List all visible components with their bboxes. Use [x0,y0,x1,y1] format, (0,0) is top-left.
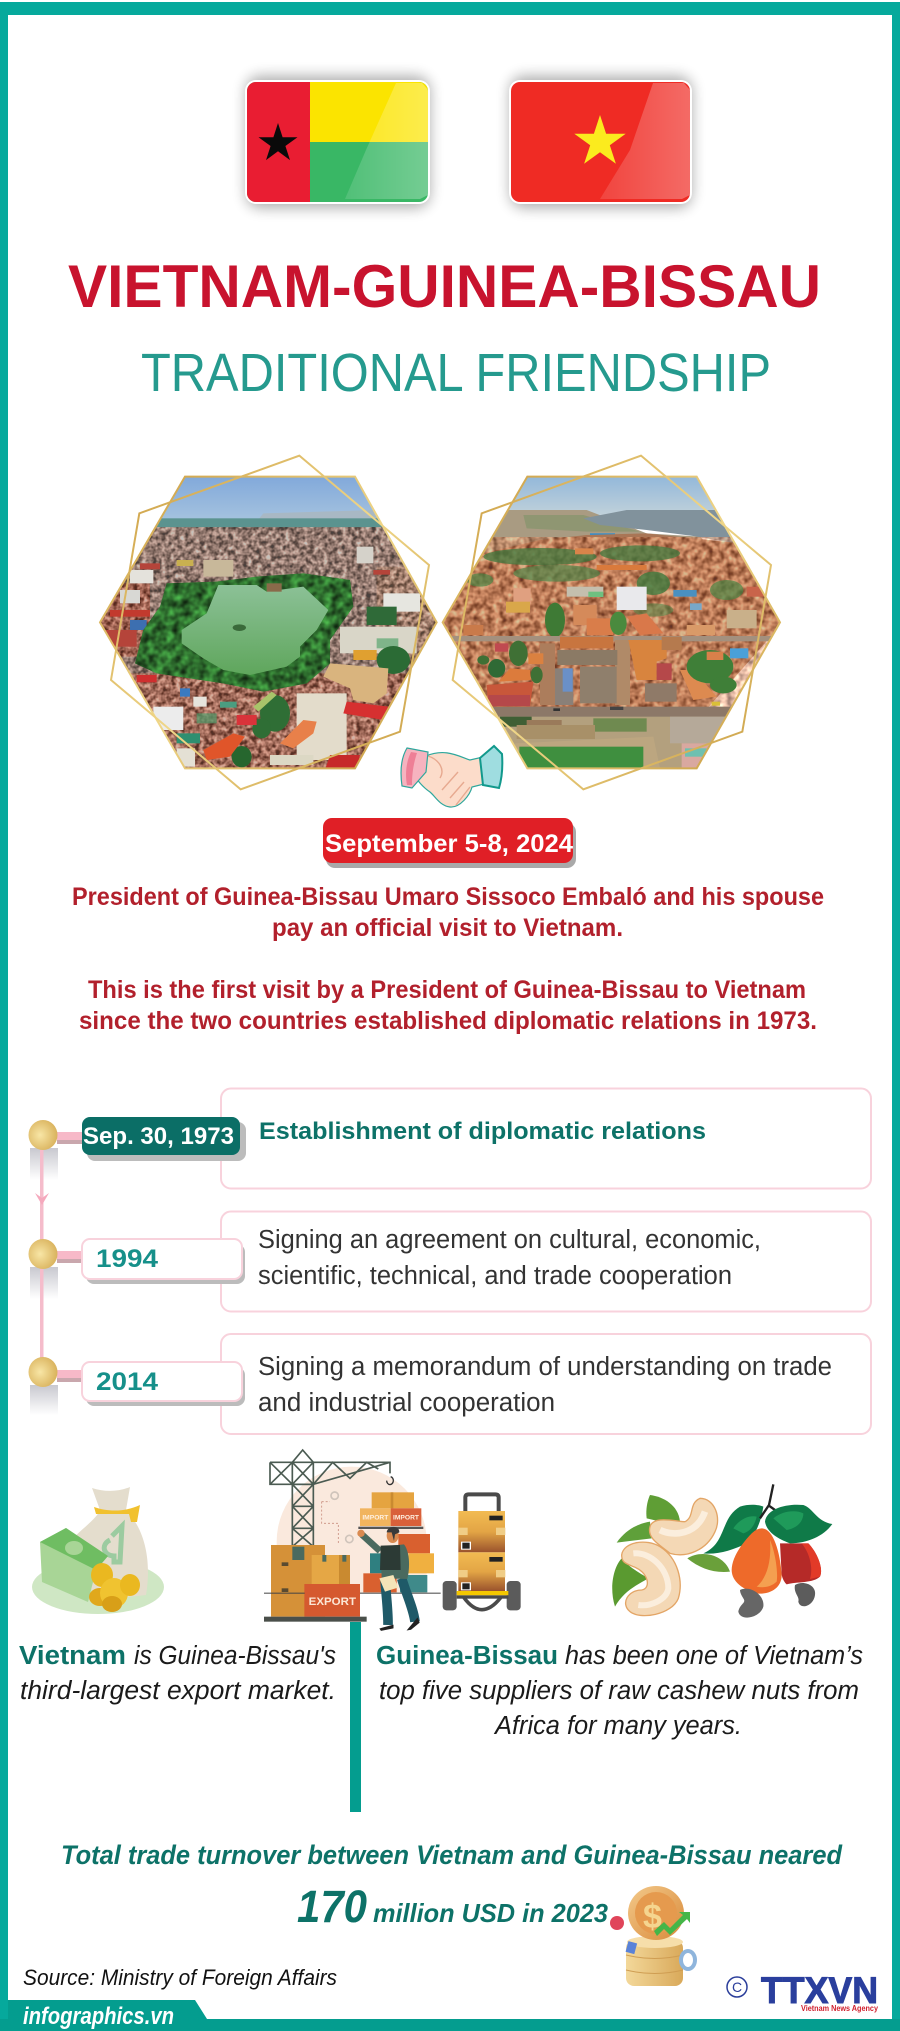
timeline [28,1088,871,1434]
text: Guinea-Bissau cashew supply: Guinea-Bissau [376,1642,558,1670]
text block: official visit [72,883,824,1035]
text: Vietnam export market [19,1642,336,1705]
logo: TTXVN: Vietnam News Agency [801,2004,878,2013]
leaves [612,1495,763,1607]
subtitle: TRADITIONAL FRIENDSHIP [141,344,771,403]
text: Guinea-Bissau cashew supply: top five suppliers of raw cashew nuts from [379,1677,859,1705]
text: total trade turnover [61,1840,842,1932]
photo: Bissau aerial view [440,456,790,789]
date pill [323,818,576,868]
worker [357,1527,419,1630]
cashew nuts [622,1498,718,1616]
divider bar [350,1622,361,1812]
text: Vietnam export market: third-largest export market. [20,1677,336,1705]
text block: official visit: This is the first visit by a President of Guinea-Bissau to Vietnam [88,976,806,1004]
text: total trade turnover: Total trade turnover between Vietnam and Guinea-Bissau neared [61,1840,842,1870]
event 1973: Sep. 30, 1973 [83,1123,234,1150]
crane [270,1450,393,1547]
text: Guinea-Bissau cashew supply: has been one of Vietnam’s [565,1642,863,1670]
text: total trade turnover: million USD in 2023 [373,1898,609,1928]
flag: Vietnam [509,76,692,208]
gold outline: hexagon frame [443,456,780,789]
text: total trade turnover: 170 [297,1881,367,1932]
cargo boxes: EXPORT [309,1596,356,1608]
date pill: September 5-8, 2024 [325,830,573,858]
import crates: IMPORT [393,1515,419,1522]
event 2014: 2014 [96,1368,158,1396]
text: Vietnam export market: is Guinea-Bissau's [134,1642,336,1670]
stem [760,1484,775,1518]
event 1994: 1994 [96,1245,158,1273]
event 2014: and industrial cooperation [258,1389,555,1417]
cargo boxes [264,1545,367,1622]
event 1973: Establishment of diplomatic relations [259,1118,706,1145]
text block: official visit: President of Guinea-Bissau Umaro Sissoco Embaló and his spouse [72,883,824,911]
event 2014: Signing a memorandum of understanding on trade [258,1353,832,1381]
import crates: IMPORT [362,1515,388,1522]
cashew fruits [732,1505,832,1618]
event 2014 [28,1334,871,1434]
ground line [264,1593,305,1594]
title: VIETNAM-GUINEA-BISSAU [68,253,821,320]
event 1994: Signing an agreement on cultural, economic, [258,1226,761,1254]
import crates [358,1492,423,1529]
text block: official visit: since the two countries established diplomatic relations in 1973. [79,1007,817,1035]
event 1973 [28,1088,871,1188]
icon: handshake [401,746,502,807]
text: Guinea-Bissau cashew supply: Africa for many years. [493,1712,742,1740]
event 1994: scientific, technical, and trade cooperation [258,1262,732,1290]
backdrop circle [277,1467,427,1593]
source: Source: Ministry of Foreign Affairs [23,1965,337,1990]
text block: official visit: pay an official visit to Vietnam. [272,914,623,942]
logo: TTXVN: TTXVN [761,1970,878,2011]
icon: coin stack with growth arrow [610,1886,695,1986]
icon: cashew nuts and fruit [612,1484,832,1618]
timeline spine and arrow [30,1148,58,1415]
event 1994 [28,1212,871,1312]
stacked containers [363,1534,434,1592]
text: Guinea-Bissau cashew supply [376,1642,863,1740]
footer tab: infographics.vn [23,2003,174,2030]
logo: TTXVN: C [732,1979,742,1995]
gold outline: hexagon frame [100,456,437,789]
text: Vietnam export market: Vietnam [19,1642,126,1670]
photo: Hanoi aerial view with lake [90,456,440,789]
hand trolley [443,1494,521,1610]
flag: Guinea-Bissau [245,76,430,208]
icon: coin stack with growth arrow: $ [643,1898,662,1936]
icon: money bag [32,1487,164,1614]
icon: export and import logistics [264,1450,521,1630]
